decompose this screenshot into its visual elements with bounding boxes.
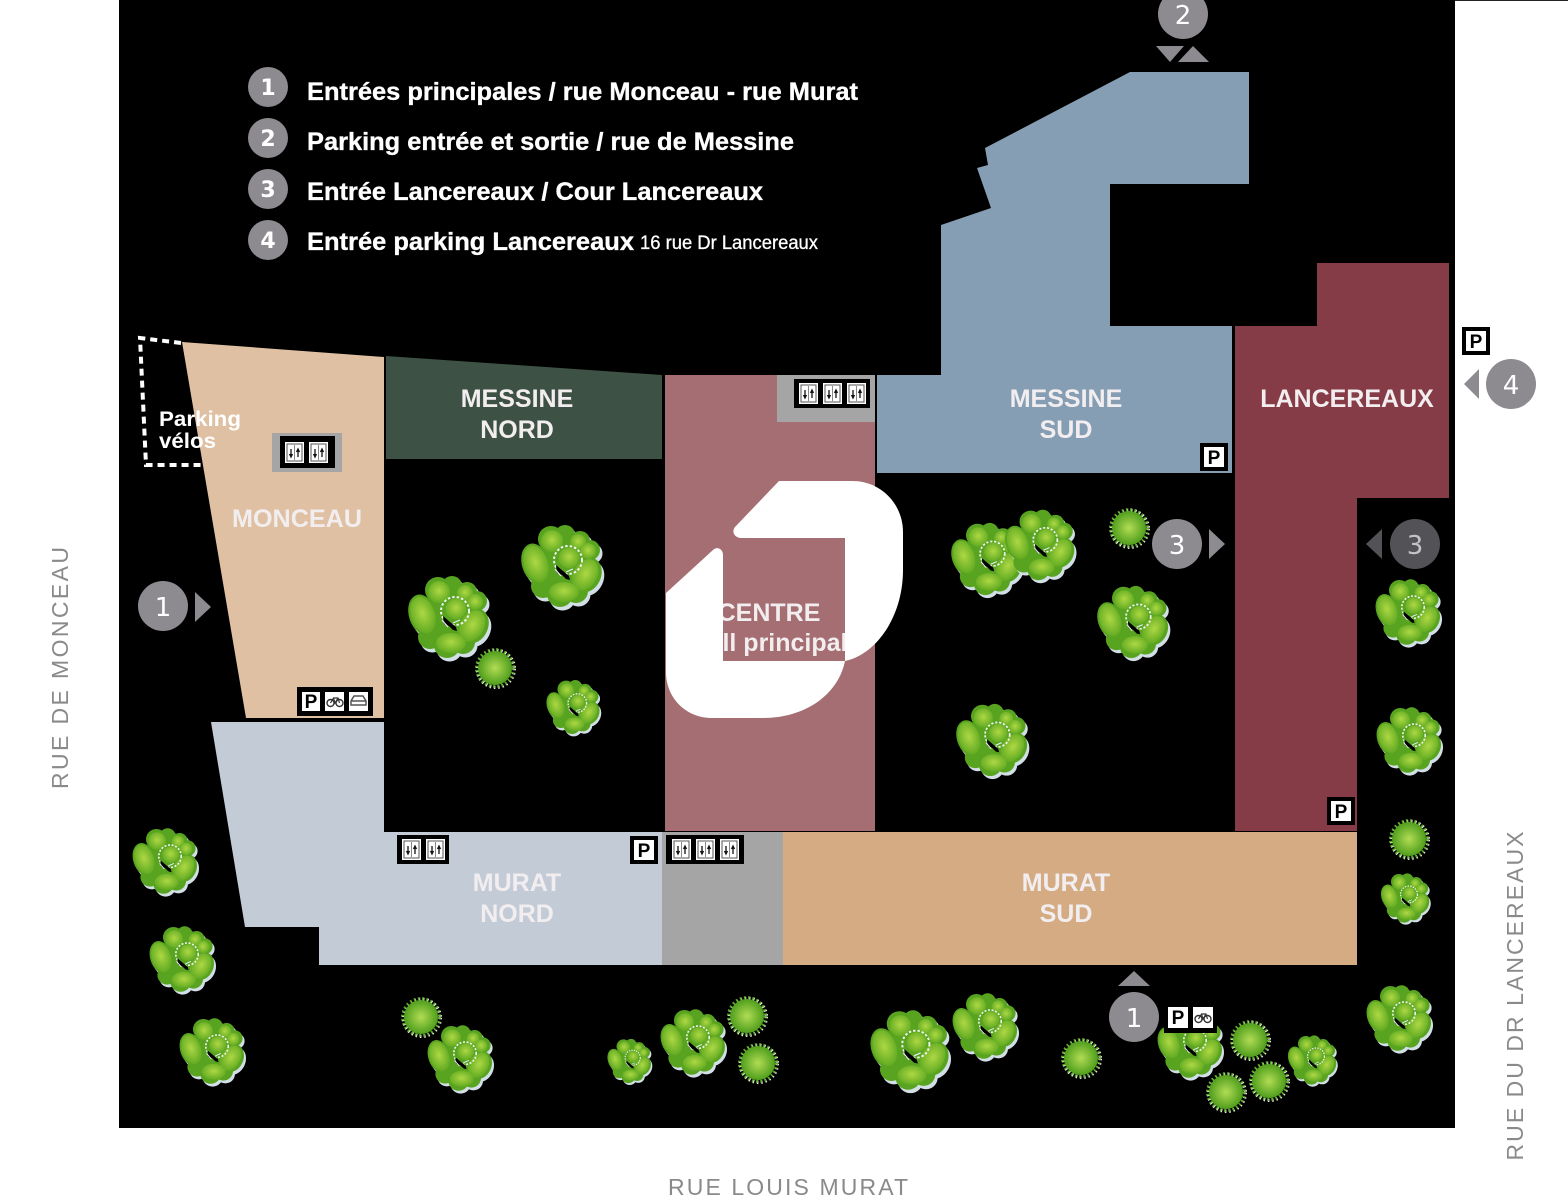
street label: Rue Louis Murat: RUE LOUIS MURAT [668, 1174, 908, 1200]
entrance 1: Murat: 1 [1126, 1004, 1142, 1034]
entrance 1: Monceau: 1 [155, 593, 171, 623]
label: Murat Nord: NORD [480, 900, 554, 928]
elevators: Centre [794, 379, 870, 408]
building: Murat Sud [783, 832, 1357, 965]
legend marker 3 [248, 169, 288, 209]
elevators: Monceau [272, 433, 342, 472]
building: Messine Nord [386, 356, 662, 459]
entrance 3: Lancereaux left: 3 [1169, 531, 1185, 561]
entrance 1: Murat [1109, 971, 1159, 1042]
legend text 1: Entrées principales / rue Monceau - rue Murat [307, 78, 859, 106]
legend [248, 67, 859, 260]
logo [666, 481, 903, 718]
legend marker 3: 3 [260, 178, 276, 203]
label: Murat Nord: MURAT [473, 869, 561, 897]
bicycle parking outline [140, 338, 202, 465]
parking icon: Murat Nord: P [638, 841, 651, 862]
parking, bike and car icons: Monceau [297, 687, 373, 716]
parking icon: Messine Sud: P [1208, 448, 1221, 469]
parking, bike and car icons: Monceau: P [305, 692, 318, 713]
label: Murat Sud: SUD [1040, 900, 1092, 928]
label: Messine Nord: MESSINE [461, 385, 573, 413]
grey service block: Centre [777, 375, 875, 422]
label: Lancereaux: LANCEREAUX [1260, 385, 1434, 413]
label: Monceau: MONCEAU [232, 505, 362, 533]
street label: Rue de Monceau: RUE DE MONCEAU [47, 547, 73, 789]
trees and shrubs [129, 510, 1447, 1111]
street label: Rue du Dr Lancereaux: RUE DU DR LANCEREAUX [1502, 832, 1528, 1160]
building: Monceau [182, 342, 384, 718]
entrance 3: Lancereaux left [1152, 519, 1225, 569]
parking icon: Lancereaux top [1462, 327, 1490, 355]
parking and bike icons: Murat: P [1172, 1008, 1185, 1029]
parking icon: Lancereaux top: P [1470, 332, 1483, 353]
legend marker 1: 1 [260, 76, 276, 101]
legend marker 2: 2 [260, 127, 276, 152]
parking and bike icons: Murat [1164, 1003, 1217, 1033]
label: Parking vélos: vélos [159, 430, 216, 453]
elevators: Murat Nord [397, 835, 449, 864]
parking icon: Murat Nord [630, 836, 658, 864]
building: Lancereaux [1235, 263, 1449, 831]
label: Messine Sud: MESSINE [1010, 385, 1122, 413]
parking icon: Messine Sud [1200, 443, 1228, 471]
label: Messine Nord: NORD [480, 416, 554, 444]
legend marker 2 [248, 118, 288, 158]
entrance 2: Messine [1156, 0, 1209, 62]
entrance 4: parking Lancereaux: 4 [1503, 371, 1519, 401]
legend marker 4 [248, 220, 288, 260]
entrance 3: Lancereaux right [1366, 519, 1440, 569]
building: Murat Nord [211, 722, 662, 965]
legend text 3: Entrée Lancereaux / Cour Lancereaux [307, 178, 763, 206]
grey service block: Murat [662, 832, 783, 965]
legend marker 4: 4 [260, 229, 276, 254]
entrance 3: Lancereaux right: 3 [1407, 531, 1423, 561]
legend text 4 address: 16 rue Dr Lancereaux [640, 233, 818, 254]
legend marker 1 [248, 67, 288, 107]
label: Murat Sud: MURAT [1022, 869, 1110, 897]
entrance 1: Monceau [138, 581, 211, 631]
legend text 2: Parking entrée et sortie / rue de Messine [307, 128, 794, 156]
label: Centre Hall principal: CENTRE [718, 599, 820, 627]
parking icon: Lancereaux bottom [1327, 797, 1355, 825]
parking icon: Lancereaux bottom: P [1335, 802, 1348, 823]
legend text 4: Entrée parking Lancereaux [307, 228, 634, 256]
label: Parking vélos: Parking [159, 408, 241, 431]
label: Messine Sud: SUD [1040, 416, 1092, 444]
entrance 4: parking Lancereaux [1464, 359, 1536, 409]
entrance 2: Messine: 2 [1175, 1, 1191, 31]
label: Centre Hall principal: Hall principal [691, 629, 847, 657]
building: Messine Sud [877, 72, 1249, 473]
elevators: Murat centre [666, 835, 744, 864]
building: Centre [665, 375, 875, 831]
